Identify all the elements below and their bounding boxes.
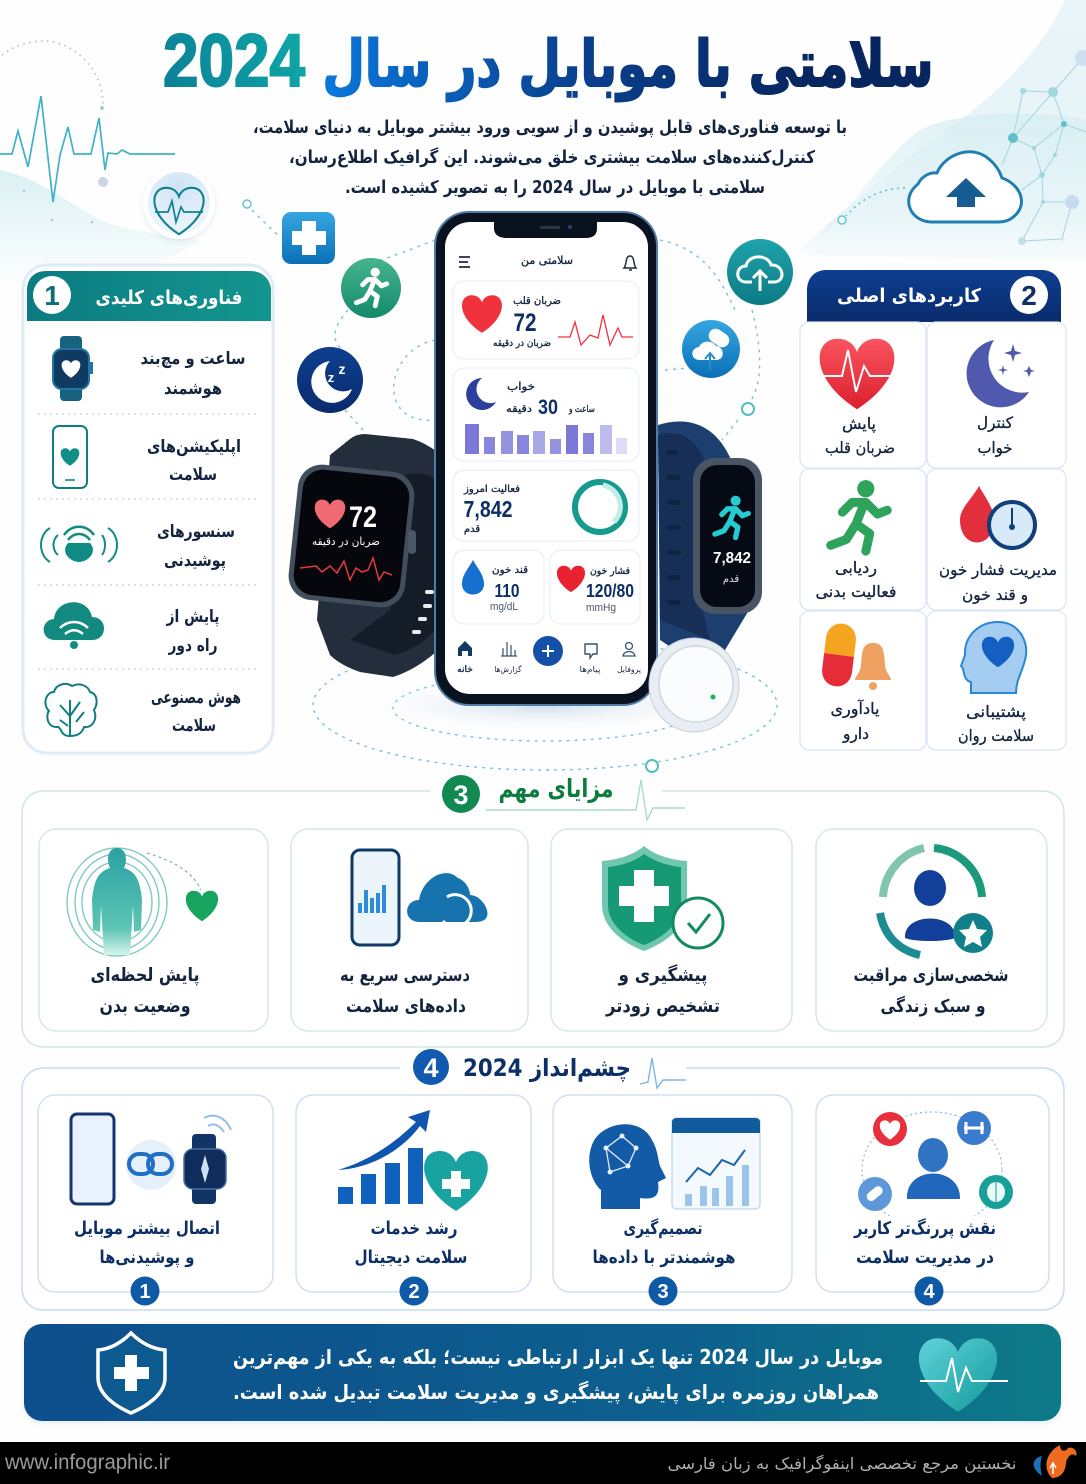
number badges: 4	[923, 1281, 935, 1303]
ecg line decoration	[0, 96, 175, 202]
section: benefits	[22, 774, 1064, 1047]
outlook: connectivity: و پوشیدنی‌ها	[100, 1248, 194, 1268]
bottom navigation	[457, 636, 641, 675]
panel 1 header	[27, 271, 271, 321]
tech: health app: اپلیکیشن‌های	[147, 437, 241, 457]
bottom navigation: پروفایل	[617, 665, 641, 674]
icon: moon circle: z	[328, 370, 335, 385]
tech: smart watch: هوشمند	[164, 379, 222, 399]
tech: smart watch: ساعت و مچ‌بند	[140, 349, 246, 369]
benefits heading: مزایای مهم	[498, 774, 614, 804]
card: heart rate: ضربان قلب	[513, 295, 561, 307]
app: medication reminder: یادآوری	[830, 699, 880, 719]
fitness band: 7,842	[713, 550, 751, 567]
panel 2 header: کاربردهای اصلی	[837, 285, 982, 307]
banner text: همراهان روزمره برای پایش، پیشگیری و مدیریت سلامت تبدیل شده است.	[233, 1380, 879, 1405]
tech: wearable sensors: پوشیدنی	[164, 551, 226, 571]
card: heart rate: 72	[514, 309, 536, 337]
card: activity: فعالیت امروز	[463, 484, 520, 495]
app: heart rate	[820, 339, 895, 457]
card: activity: 7,842	[464, 496, 512, 522]
card: heart rate: ضربان در دقیقه	[493, 338, 551, 349]
app: mental health: سلامت روان	[958, 727, 1034, 746]
outlook: digital growth: رشد خدمات	[370, 1219, 458, 1239]
outlook: data decisions	[589, 1118, 760, 1268]
icon: shield	[98, 1333, 165, 1413]
outlook: digital growth	[338, 1110, 488, 1268]
tech: remote monitoring: راه دور	[168, 636, 218, 656]
app: mental health: پشتیبانی	[966, 703, 1026, 722]
title	[163, 19, 934, 102]
panel: main applications	[800, 270, 1066, 750]
app: sleep	[967, 340, 1035, 457]
tech: health app: سلامت	[169, 465, 217, 485]
tech: remote monitoring	[44, 602, 220, 656]
card: blood pressure: 120/80	[586, 581, 634, 601]
outlook: digital growth: سلامت دیجیتال	[354, 1248, 468, 1268]
number badges: 2	[408, 1281, 420, 1303]
footer bar	[0, 1442, 1086, 1484]
outlook heading: 4	[423, 1053, 439, 1083]
fitness band	[658, 421, 762, 660]
card: sleep	[453, 368, 639, 461]
card: blood sugar: mg/dL	[490, 601, 518, 613]
icon: cloud pill circle	[682, 320, 740, 378]
number badges	[130, 1276, 944, 1306]
intro text: سلامتی با موبایل در سال 2024 را به تصویر کشیده است.	[345, 178, 765, 198]
footer bar: www.infographic.ir	[4, 1451, 170, 1474]
panel 2 header: 2	[1021, 280, 1037, 311]
decorative dotted orbit	[252, 210, 777, 770]
tech: remote monitoring: پایش از	[166, 607, 220, 627]
section: outlook 2024	[22, 1049, 1064, 1310]
app: medication reminder: دارو	[842, 725, 869, 744]
intro text: با توسعه فناوری‌های قابل پوشیدن و از سویی ورود بیشتر موبایل به دنیای سلامت،	[253, 118, 847, 138]
card: activity	[453, 470, 639, 541]
outlook: connectivity: اتصال بیشتر موبایل	[74, 1219, 220, 1239]
tech: health app	[53, 426, 241, 488]
icon: heart pulse	[919, 1338, 1008, 1412]
app: activity: ردیابی	[835, 559, 877, 577]
tech: wearable sensors: سنسورهای	[157, 522, 235, 542]
card: blood sugar: قند خون	[492, 565, 528, 576]
tech: AI	[45, 684, 241, 736]
outlook: user role: در مدیریت سلامت	[856, 1248, 994, 1268]
outlook heading: چشم‌انداز 2024	[463, 1054, 631, 1082]
wearable sensor disc	[649, 638, 739, 732]
icon: cloud upload circle	[727, 239, 793, 305]
app: blood pressure: و قند خون	[962, 586, 1028, 605]
card: blood pressure: mmHg	[586, 602, 616, 614]
outlook: connectivity	[71, 1114, 231, 1268]
fitness band: قدم	[723, 574, 739, 585]
app: sleep: کنترل	[977, 414, 1014, 432]
outlook: data decisions: تصمیم‌گیری	[624, 1218, 702, 1239]
card: sleep: دقیقه	[506, 404, 532, 415]
card: blood sugar	[453, 550, 544, 624]
tech: AI: هوش مصنوعی	[151, 688, 241, 708]
app: mental health	[958, 622, 1034, 746]
outlook: user role	[850, 1111, 1013, 1268]
app: sleep: خواب	[978, 439, 1012, 457]
tech: wearable sensors	[41, 522, 235, 571]
bottom navigation: پیام‌ها	[580, 665, 600, 674]
benefit: real-time monitoring	[67, 848, 218, 1017]
number badges: 3	[657, 1281, 669, 1303]
app: heart rate: پایش	[842, 415, 876, 434]
phone	[435, 212, 657, 705]
watch heart	[315, 500, 345, 528]
icon: heart badge	[143, 167, 215, 239]
tech: AI: سلامت	[172, 716, 216, 736]
tech: smart watch	[53, 336, 246, 401]
card: blood pressure	[550, 550, 640, 624]
benefit: quick data access: داده‌های سلامت	[346, 996, 466, 1017]
outlook: user role: نقش پررنگ‌تر کاربر	[853, 1218, 996, 1239]
benefit: prevention: تشخیص زودتر	[605, 996, 720, 1017]
panel 2 header	[807, 270, 1061, 322]
benefits heading: 3	[453, 780, 469, 810]
panel 1 header: فناوری‌های کلیدی	[96, 287, 242, 309]
app: medication reminder	[820, 622, 891, 744]
closing banner	[24, 1324, 1061, 1421]
benefit: quick data access: دسترسی سریع به	[340, 965, 470, 986]
app: activity	[816, 480, 896, 601]
smartwatch	[286, 434, 436, 677]
panel 1 header: 1	[44, 280, 60, 311]
intro text	[253, 118, 847, 198]
icon: runner circle	[341, 258, 401, 318]
benefit: prevention: پیشگیری و	[618, 964, 708, 986]
icon: cloud upload outline	[838, 152, 1021, 224]
card: sleep: 30	[538, 396, 558, 419]
benefit: personalization: و سبک زندگی	[880, 995, 986, 1017]
card: heart rate	[453, 281, 639, 359]
watch caption: ضربان در دقیقه	[312, 535, 380, 548]
intro text: کنترل‌کننده‌های سلامت بیشتری خلق می‌شوند. این گرافیک اطلاع‌رسان،	[289, 147, 816, 168]
benefit: personalization: شخصی‌سازی مراقبت	[854, 965, 1008, 986]
panel: key technologies	[23, 265, 273, 753]
footer bar: نخستین مرجع تخصصی اینفوگرافیک به زبان فارسی	[668, 1454, 1016, 1474]
benefit: personalization	[854, 848, 1008, 1017]
banner text	[233, 1345, 883, 1405]
icon: moon circle: z	[338, 361, 346, 377]
app: heart rate: ضربان قلب	[825, 439, 895, 457]
outlook: data decisions: هوشمندتر با داده‌ها	[592, 1248, 736, 1268]
app: activity: فعالیت بدنی	[816, 583, 896, 601]
bottom navigation: گزارش‌ها	[494, 664, 522, 674]
card: sleep: خواب	[507, 380, 535, 393]
bottom navigation: خانه	[457, 665, 473, 675]
number badges: 1	[139, 1281, 151, 1303]
benefit: real-time monitoring: پایش لحظه‌ای	[90, 965, 200, 986]
watch ecg	[300, 558, 392, 580]
icon: moon circle	[297, 347, 363, 413]
benefits heading	[442, 774, 685, 820]
benefit: quick data access	[340, 850, 487, 1017]
watch reading: 72	[349, 501, 377, 534]
benefit: prevention	[602, 846, 723, 1017]
app title: سلامتی من	[521, 254, 573, 267]
banner text: موبایل در سال 2024 تنها یک ابزار ارتباطی نیست؛ بلکه به یکی از مهم‌ترین	[233, 1345, 883, 1369]
app: blood pressure	[939, 486, 1057, 605]
icon: medical plus tile	[282, 212, 335, 264]
card: sleep: ساعت و	[568, 404, 595, 415]
card: blood pressure: فشار خون	[590, 566, 630, 577]
outlook heading	[413, 1049, 686, 1088]
icon: footer logo	[1034, 1445, 1077, 1478]
card: blood sugar: 110	[494, 581, 520, 601]
app: blood pressure: مدیریت فشار خون	[939, 561, 1057, 579]
benefit: real-time monitoring: وضعیت بدن	[100, 996, 190, 1017]
card: activity: قدم	[464, 524, 480, 535]
title: 2024	[163, 19, 305, 102]
